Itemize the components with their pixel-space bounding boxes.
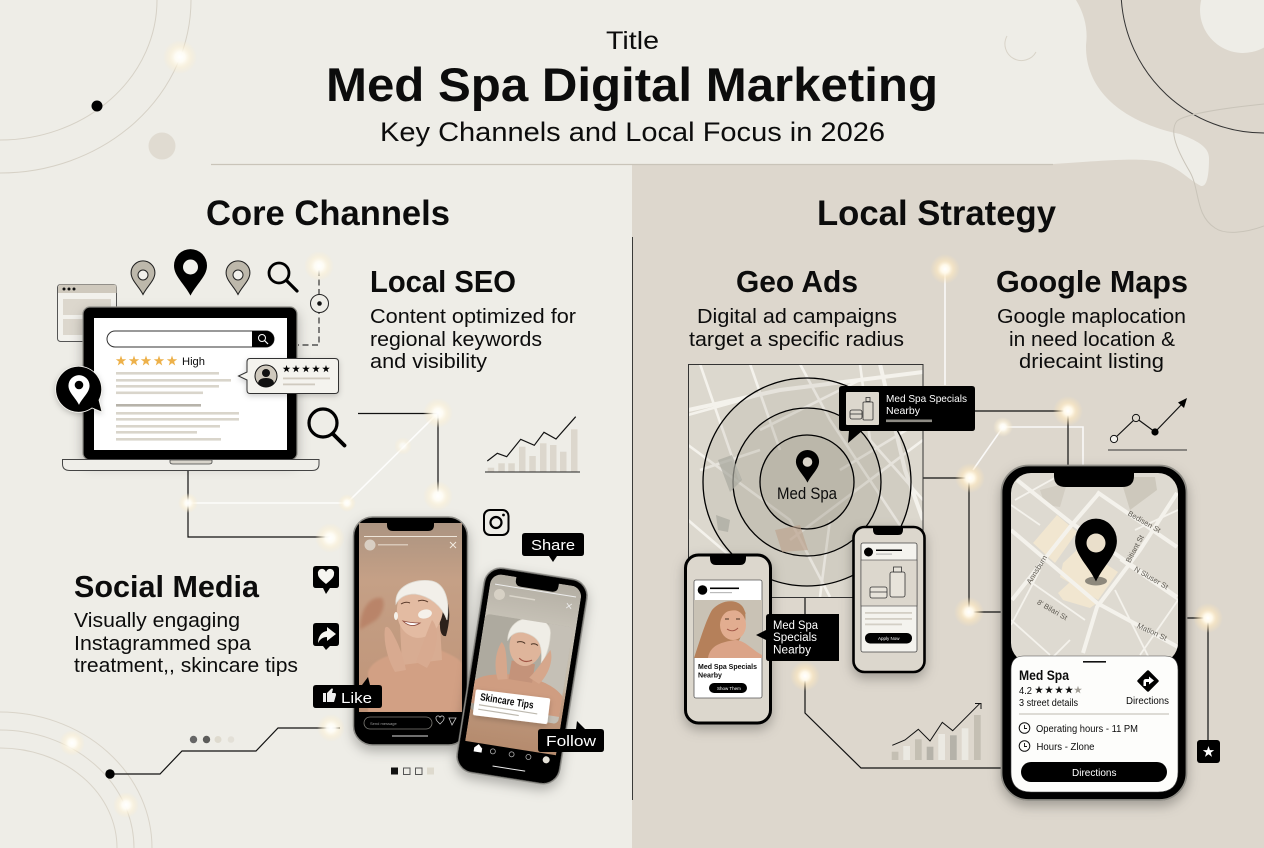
icon: share bubble bbox=[313, 623, 339, 650]
ad card: Nearby bbox=[698, 670, 723, 680]
ad card: Apply Now bbox=[878, 636, 900, 641]
directions button: Directions bbox=[1072, 768, 1116, 779]
hours row 1: Operating hours - 11 PM bbox=[1036, 724, 1138, 735]
pagination dots bbox=[190, 736, 234, 743]
specials callout 2 bbox=[756, 614, 839, 661]
text: social media: Visually engaging bbox=[74, 609, 240, 632]
phone: instagram story bbox=[354, 517, 468, 745]
specials callout: Med Spa Specials bbox=[886, 393, 967, 405]
connector lines bbox=[110, 269, 1208, 774]
phone: skincare tips post bbox=[454, 566, 590, 786]
rating stars bbox=[116, 356, 177, 365]
result text lines bbox=[116, 372, 239, 441]
hours row 2: Hours - Zlone bbox=[1036, 742, 1095, 753]
phone: left ad bbox=[686, 555, 770, 723]
text: local SEO: and visibility bbox=[370, 350, 488, 373]
bottom nav bbox=[472, 743, 550, 775]
map label: Med Spa bbox=[777, 484, 837, 503]
ad card bbox=[861, 543, 917, 652]
laptop body bbox=[83, 307, 297, 460]
ad card: Med Spa Specials bbox=[698, 662, 757, 671]
text: social media bbox=[74, 569, 298, 677]
text: geo ads: Digital ad campaigns bbox=[697, 305, 897, 328]
growth chart left bbox=[485, 417, 580, 472]
map screen bbox=[1011, 473, 1178, 663]
post photo bbox=[470, 614, 566, 724]
text: social media: Social Media bbox=[74, 569, 260, 604]
text: google maps bbox=[996, 264, 1188, 373]
ad photo bbox=[694, 600, 762, 658]
text: google maps: in need location & bbox=[1009, 328, 1175, 351]
phone: google maps bbox=[1002, 466, 1186, 800]
main title: Med Spa Digital Marketing bbox=[326, 58, 938, 111]
share label bbox=[522, 533, 584, 562]
laptop with search results bbox=[62, 307, 319, 470]
ad card bbox=[694, 580, 762, 698]
map screen: Annsburn bbox=[1025, 554, 1049, 586]
inner radius ring bbox=[760, 435, 854, 529]
text: google maps: driecaint listing bbox=[1019, 350, 1164, 373]
eyebrow: Title bbox=[606, 27, 659, 55]
heading: core channels: Core Channels bbox=[206, 194, 450, 233]
map pin bbox=[796, 450, 819, 483]
bar chart bottom bbox=[892, 703, 981, 760]
follow label bbox=[538, 721, 604, 752]
title block bbox=[326, 27, 938, 147]
text: google maps: Google Maps bbox=[996, 264, 1188, 299]
small connector dot bbox=[105, 769, 115, 779]
icon: star badge bbox=[1197, 740, 1220, 763]
skincare tips card bbox=[472, 687, 551, 727]
icon: instagram bbox=[484, 510, 508, 535]
review bubble bbox=[238, 358, 338, 394]
listing panel bbox=[1011, 656, 1178, 792]
post screen bbox=[462, 572, 584, 756]
rating label: High bbox=[182, 356, 205, 368]
subtitle: Key Channels and Local Focus in 2026 bbox=[380, 117, 885, 147]
map screen: 8' Bilari St bbox=[1035, 598, 1070, 623]
heading: local strategy: Local Strategy bbox=[817, 194, 1057, 233]
phone: right ad bbox=[854, 527, 924, 672]
icon: heart bubble bbox=[313, 566, 339, 594]
share label: Share bbox=[531, 537, 575, 554]
specials callout 2: Specials bbox=[773, 632, 817, 644]
listing panel: 4.2 bbox=[1019, 686, 1032, 697]
message bar bbox=[364, 716, 456, 736]
text: geo ads: target a specific radius bbox=[689, 328, 904, 351]
radius map bbox=[688, 364, 923, 598]
street map bbox=[688, 364, 923, 597]
map pin bbox=[1075, 519, 1117, 586]
icon: magnifier large bbox=[309, 409, 344, 446]
map screen: Bedisen St bbox=[1126, 509, 1163, 535]
map screen: Bitiant St bbox=[1124, 533, 1146, 564]
icon: location pins bbox=[131, 249, 250, 296]
text: social media: Instagrammed spa bbox=[74, 632, 252, 655]
icon: target node bbox=[310, 294, 328, 312]
follow label: Follow bbox=[546, 733, 596, 750]
map screen: N Sluser St bbox=[1133, 564, 1171, 592]
carousel indicator squares bbox=[391, 768, 434, 774]
ad card: Show Them bbox=[717, 686, 741, 691]
message bar: Send message bbox=[370, 721, 397, 726]
directions button bbox=[1021, 762, 1167, 782]
map screen: Mation St bbox=[1136, 621, 1169, 643]
search bar bbox=[107, 331, 274, 347]
text: social media: treatment,, skincare tips bbox=[74, 654, 298, 677]
text: local SEO: regional keywords bbox=[370, 328, 542, 351]
directions icon bbox=[1137, 670, 1159, 692]
notch bbox=[387, 522, 434, 531]
trend chart top right bbox=[1108, 398, 1187, 450]
outer radius ring bbox=[703, 378, 911, 586]
text: local SEO bbox=[370, 264, 576, 373]
laptop base bbox=[62, 460, 319, 470]
middle radius ring bbox=[733, 408, 881, 556]
skincare tips card: Skincare Tips bbox=[479, 691, 535, 712]
specials callout 2: Med Spa bbox=[773, 620, 819, 632]
text: local SEO: Local SEO bbox=[370, 264, 516, 299]
laptop screen bbox=[94, 318, 287, 450]
notch bbox=[1054, 472, 1134, 487]
specials callout bbox=[839, 386, 975, 443]
specials callout: Nearby bbox=[886, 405, 921, 417]
specials callout 2: Nearby bbox=[773, 644, 811, 656]
like label bbox=[313, 677, 382, 708]
like label: Like bbox=[341, 690, 372, 707]
listing panel: 3 street details bbox=[1019, 698, 1078, 709]
text: geo ads: Geo Ads bbox=[736, 264, 858, 299]
story photo bbox=[359, 523, 462, 712]
icon: magnifier small bbox=[269, 263, 297, 291]
notch bbox=[515, 576, 559, 593]
text: geo ads bbox=[689, 264, 904, 351]
text: google maps: Google maplocation bbox=[997, 305, 1186, 328]
icon: browser window bbox=[58, 284, 116, 342]
listing panel: Directions bbox=[1126, 695, 1169, 707]
icon: location speech bubble bbox=[56, 366, 102, 412]
hours row 2 bbox=[1019, 741, 1095, 753]
text: local SEO: Content optimized for bbox=[370, 305, 576, 328]
listing panel: Med Spa bbox=[1019, 667, 1069, 683]
